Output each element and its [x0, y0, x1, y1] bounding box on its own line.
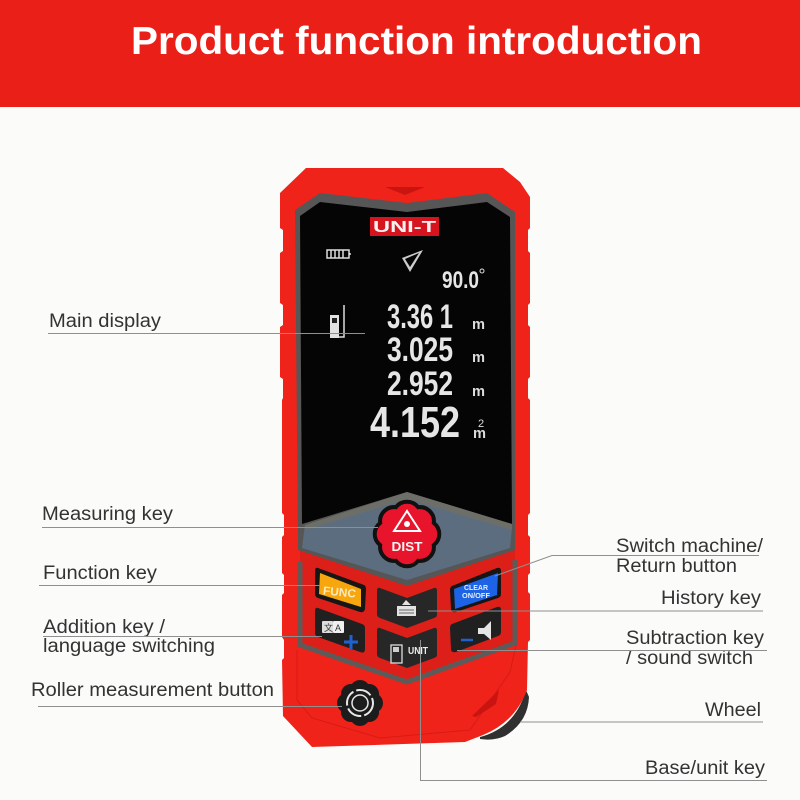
callout: addition key	[43, 617, 322, 657]
callout: history key: History key	[661, 588, 762, 609]
body lower outline	[297, 645, 516, 738]
unit 4 exponent: 2	[478, 418, 484, 430]
DIST key: DIST	[391, 539, 423, 554]
unit key	[377, 628, 437, 668]
reading 3: 2.952	[387, 365, 453, 403]
header band	[0, 0, 800, 107]
language plus key	[315, 608, 365, 653]
unit 4: m	[473, 425, 486, 442]
language plus key: 文	[324, 622, 333, 633]
FUNC key	[315, 568, 366, 612]
angle reading: 90.0	[442, 267, 479, 294]
callout: base/unit key: Base/unit key	[645, 758, 766, 779]
roller button	[337, 680, 383, 726]
clear on/off key	[450, 568, 501, 612]
UNI-T logo	[370, 217, 439, 236]
callout: subtraction key: Subtraction key	[626, 628, 765, 649]
callout: switch machine: Return button	[616, 556, 737, 577]
callout: addition key: Addition key /	[43, 617, 166, 638]
top notch	[385, 187, 425, 195]
unit 3: m	[472, 383, 485, 400]
UNI-T logo: UNI-T	[373, 219, 436, 236]
icon: triangle mode	[402, 250, 423, 272]
unit 2: m	[472, 349, 485, 366]
icon: device reference	[330, 305, 344, 338]
sound minus key	[450, 607, 501, 652]
icon: battery	[327, 250, 350, 258]
callout: wheel: Wheel	[705, 700, 761, 721]
callout: subtraction key: / sound switch	[626, 648, 753, 669]
FUNC key: FUNC	[322, 585, 356, 601]
callout: roller measurement button: Roller measurement button	[31, 680, 274, 701]
callout: subtraction key	[457, 628, 767, 669]
title: Product function introduction	[131, 20, 702, 63]
grey V key frame	[300, 560, 515, 682]
blue-grey panel	[302, 498, 512, 580]
red key bed	[300, 550, 515, 682]
callout: base/unit key	[420, 640, 767, 780]
clear on/off key: CLEAR	[464, 583, 489, 592]
callout: addition key: language switching	[43, 636, 215, 657]
reading 2: 3.025	[387, 331, 453, 369]
device: laser distance meter	[280, 168, 530, 747]
language plus key: A	[335, 623, 341, 633]
callout: function key: Function key	[43, 563, 158, 584]
degree mark	[480, 269, 484, 273]
reading 1: 3.36 1	[387, 298, 453, 336]
unit key: UNIT	[408, 645, 428, 657]
reading 4: 4.152	[370, 398, 460, 447]
side vent	[472, 690, 499, 717]
clear on/off key: ON/OFF	[462, 591, 490, 600]
grey screen frame	[295, 193, 515, 586]
grey strip on panel	[305, 492, 512, 530]
callout: measuring key: Measuring key	[42, 504, 174, 525]
callout: switch machine	[495, 536, 764, 577]
callout: switch machine: Switch machine/	[616, 536, 764, 557]
DIST key	[375, 502, 439, 566]
unit 1: m	[472, 316, 485, 333]
wheel	[480, 690, 529, 740]
black screen	[300, 202, 512, 524]
callout: main display: Main display	[49, 311, 162, 332]
red body	[280, 168, 530, 747]
history key	[377, 588, 437, 628]
